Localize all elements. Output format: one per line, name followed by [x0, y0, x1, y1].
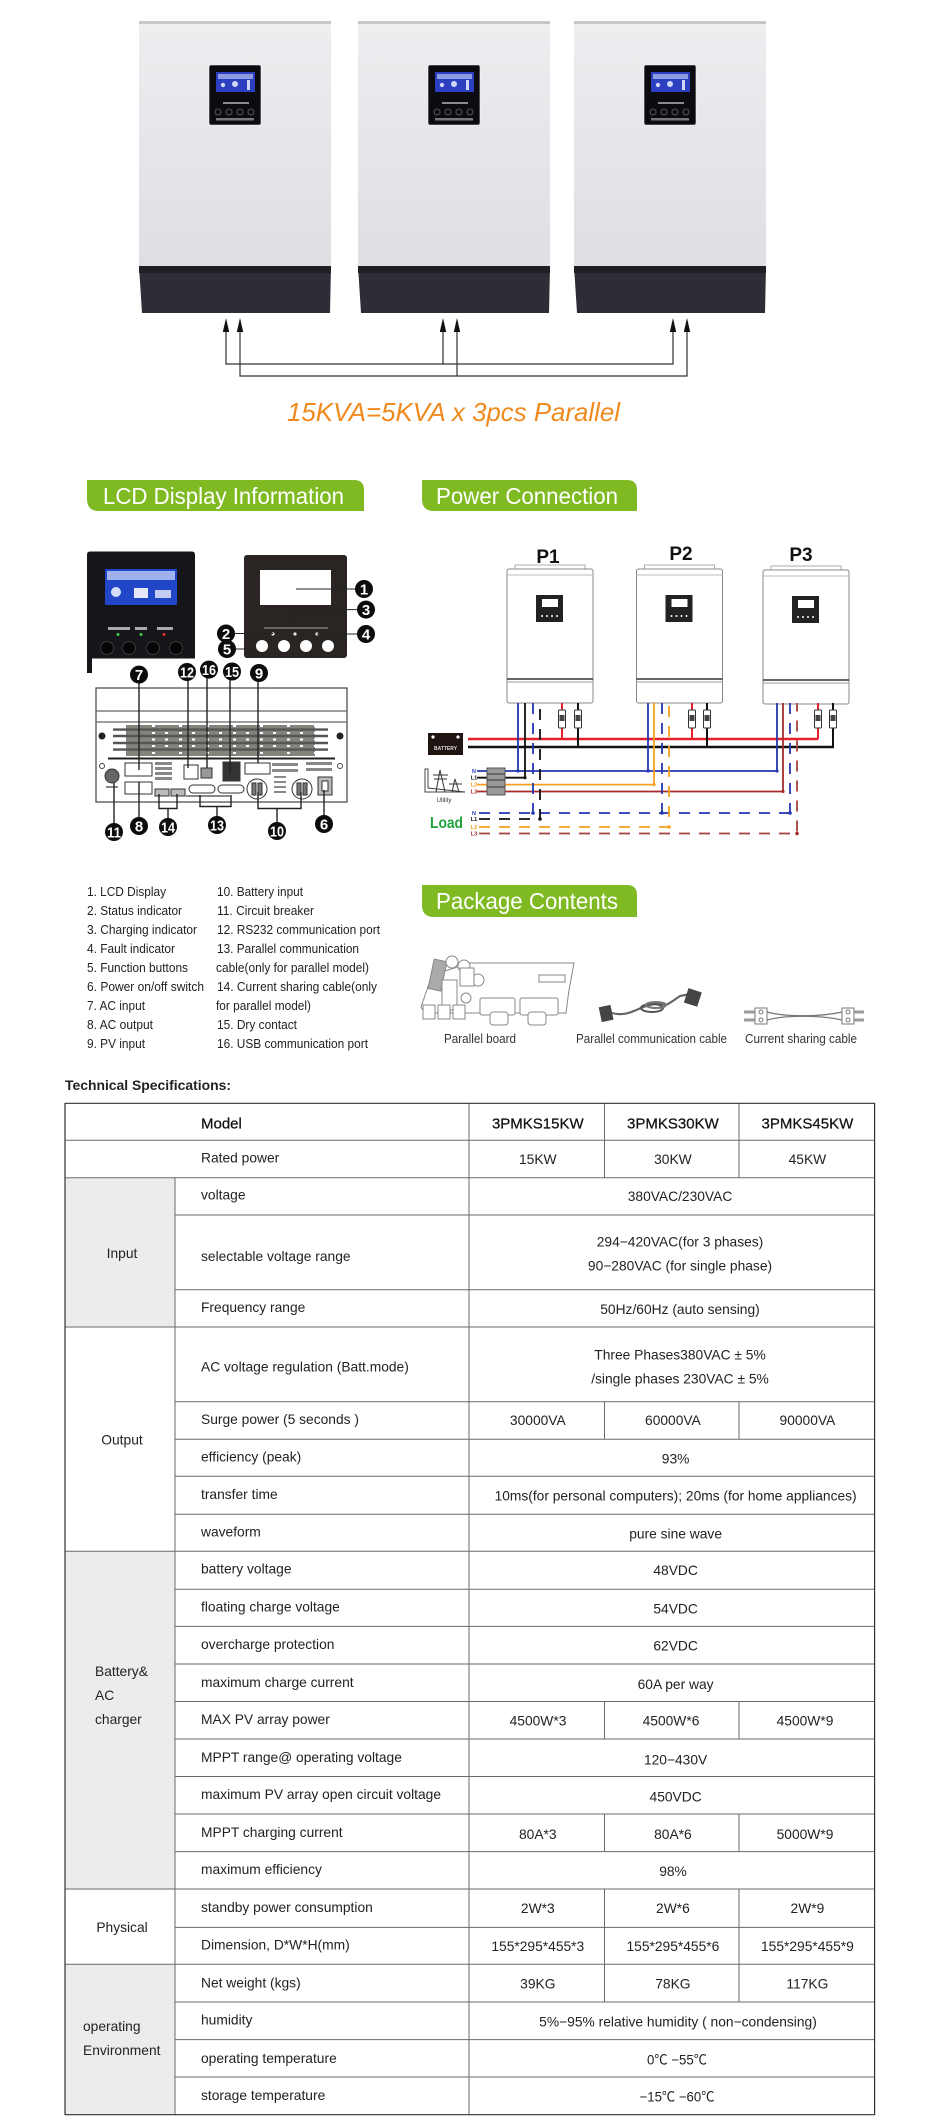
- parameter labels: Rated power: [201, 1150, 280, 1166]
- ports row: [105, 762, 332, 799]
- values: 80A*3: [519, 1827, 557, 1842]
- heading: LCD Display Information: LCD Display Information: [103, 483, 344, 509]
- phase labels: [471, 769, 477, 838]
- callout numbers: 11: [107, 824, 121, 842]
- parameter labels: operating temperature: [201, 2051, 337, 2066]
- icon: parallel communication cable: [599, 988, 702, 1022]
- unit labels: P2: [669, 544, 693, 565]
- callout numbers: 4: [362, 626, 371, 644]
- category labels: AC: [95, 1688, 114, 1703]
- text block: legend column 2: 11. Circuit breaker: [217, 903, 315, 918]
- values: 5000W*9: [777, 1827, 834, 1842]
- values: 30000VA: [510, 1413, 566, 1428]
- values: 5%−95% relative humidity ( non−condensing): [539, 2015, 817, 2030]
- DC wires: [468, 703, 834, 747]
- parameter labels: battery voltage: [201, 1562, 292, 1576]
- callout numbers: 10: [270, 824, 284, 840]
- unit labels: P3: [789, 545, 813, 566]
- icon: AC terminal block: [487, 768, 505, 795]
- values: 90−280VAC (for single phase): [588, 1259, 772, 1274]
- text block: legend column 2: 13. Parallel communication: [217, 941, 359, 956]
- values: 93%: [662, 1452, 689, 1467]
- values: 2W*6: [656, 1901, 690, 1916]
- inverter 3: [574, 21, 766, 313]
- text block: legend column 2: 14. Current sharing cable(only: [217, 979, 377, 994]
- AC input wires: [477, 703, 783, 792]
- header row: 3PMKS45KW: [762, 1116, 854, 1132]
- values: 98%: [659, 1864, 687, 1879]
- diagram: power connection wiring: [425, 544, 849, 838]
- parameter labels: maximum charge current: [201, 1675, 354, 1690]
- phase labels: N: [472, 811, 476, 817]
- values: Three Phases380VAC ± 5%: [594, 1347, 766, 1362]
- parameter labels: [200, 1150, 441, 2103]
- text block: legend column 2: [216, 884, 380, 1051]
- values: 80A*6: [654, 1827, 692, 1842]
- values: 60000VA: [645, 1413, 702, 1428]
- callout numbers: 9: [255, 666, 263, 682]
- parameter labels: MPPT range@ operating voltage: [201, 1750, 402, 1765]
- phase labels: L3: [471, 790, 477, 796]
- package item captions: Current sharing cable: [745, 1031, 857, 1046]
- parameter labels: maximum PV array open circuit voltage: [201, 1787, 441, 1802]
- text block: legend column 1: 3. Charging indicator: [87, 922, 198, 937]
- values: 117KG: [786, 1977, 828, 1992]
- package item captions: [444, 1031, 857, 1046]
- callout numbers: 2: [222, 626, 230, 643]
- parameter labels: overcharge protection: [201, 1637, 334, 1652]
- values: 10ms(for personal computers); 20ms (for home appliances): [495, 1489, 857, 1504]
- text block: legend column 1: 9. PV input: [87, 1036, 145, 1051]
- values: 50Hz/60Hz (auto sensing): [600, 1302, 760, 1317]
- values: 294−420VAC(for 3 phases): [597, 1235, 763, 1250]
- phase labels: L1: [471, 776, 477, 782]
- parameter labels: Dimension, D*W*H(mm): [201, 1938, 350, 1952]
- text block: legend column 2: 10. Battery input: [217, 884, 303, 899]
- parameter labels: Surge power (5 seconds ): [201, 1412, 359, 1427]
- heading: Power Connection: Power Connection: [436, 483, 618, 509]
- load label: Load: [430, 815, 463, 832]
- parameter labels: voltage: [201, 1188, 246, 1202]
- text block: legend column 2: 16. USB communication port: [217, 1036, 368, 1051]
- header row: 3PMKS15KW: [492, 1116, 584, 1132]
- text block: legend column 2: 12. RS232 communication port: [217, 922, 380, 937]
- header row: Model: [201, 1116, 242, 1132]
- parameter labels: humidity: [201, 2012, 252, 2028]
- load dashed wires: [479, 703, 797, 834]
- values: 45KW: [789, 1152, 826, 1167]
- category labels: [83, 1246, 161, 2058]
- text block: legend column 1: 4. Fault indicator: [87, 941, 176, 956]
- parameter labels: waveform: [200, 1524, 261, 1540]
- callout numbers: 7: [135, 667, 143, 684]
- inverter units: [507, 565, 849, 704]
- unit labels: P1: [536, 547, 560, 568]
- text block: legend column 1: 2. Status indicator: [87, 903, 183, 918]
- callout numbers: 3: [362, 602, 370, 619]
- values: /single phases 230VAC ± 5%: [591, 1371, 769, 1386]
- text block: legend column 1: 6. Power on/off switch: [87, 979, 204, 994]
- parameter labels: transfer time: [201, 1487, 278, 1502]
- callout numbers: 13: [210, 818, 224, 834]
- phase labels: N: [472, 769, 476, 775]
- product photo: three inverters connected in parallel: [139, 21, 766, 313]
- panel: LCD front diagram with callouts: [234, 555, 358, 658]
- inverter 2: [358, 21, 550, 313]
- values: 4500W*3: [510, 1714, 567, 1729]
- category labels: Input: [107, 1246, 138, 1261]
- text block: legend column 1: 7. AC input: [87, 998, 145, 1013]
- callout numbers: 14: [161, 820, 176, 836]
- callout numbers: 6: [320, 816, 328, 834]
- callout numbers: 16: [202, 662, 216, 679]
- diagram: rear panel of inverter: [96, 670, 347, 832]
- category labels: operating: [83, 2019, 141, 2034]
- heading: Package Contents: Package Contents: [436, 888, 618, 914]
- text block: legend column 2: for parallel model): [216, 998, 311, 1013]
- parameter labels: Net weight (kgs): [201, 1976, 301, 1990]
- values: 450VDC: [650, 1790, 702, 1805]
- arrows: parallel connection lines between inverters: [223, 318, 690, 376]
- parameter labels: selectable voltage range: [201, 1249, 351, 1264]
- values: pure sine wave: [629, 1527, 722, 1542]
- parameter labels: AC voltage regulation (Batt.mode): [201, 1360, 409, 1374]
- values: 4500W*9: [777, 1714, 834, 1729]
- callout numbers: 15: [225, 664, 239, 681]
- phase labels: L3: [471, 832, 477, 838]
- phase labels: L2: [471, 825, 477, 831]
- package item captions: Parallel board: [444, 1031, 516, 1046]
- text block: legend column 1: 5. Function buttons: [87, 960, 188, 975]
- callout numbers: 1: [360, 582, 368, 598]
- text block: legend column 2: 15. Dry contact: [217, 1017, 297, 1032]
- values: −15℃ −60℃: [640, 2090, 715, 2105]
- parameter labels: floating charge voltage: [201, 1600, 340, 1614]
- parameter labels: MPPT charging current: [201, 1825, 343, 1840]
- icon: utility pylons: Utility: [437, 798, 451, 804]
- values: 155*295*455*6: [626, 1939, 720, 1954]
- icon: current sharing cable: [744, 1008, 864, 1024]
- values: 0℃ −55℃: [647, 2052, 707, 2068]
- callout numbers: [105, 580, 375, 842]
- text block: legend column 1: 8. AC output: [87, 1017, 153, 1032]
- values: 90000VA: [780, 1413, 836, 1428]
- icon: utility pylons: [425, 769, 465, 804]
- unit labels: [536, 544, 813, 568]
- header row: 3PMKS30KW: [627, 1116, 720, 1132]
- category labels: Output: [101, 1432, 143, 1448]
- caption: parallel configuration: 15KVA=5KVA x 3pcs Parallel: [287, 397, 621, 427]
- callout numbers: 12: [180, 664, 194, 682]
- icon: battery: BATTERY: [434, 746, 458, 752]
- values: 48VDC: [653, 1563, 698, 1578]
- values: 39KG: [520, 1977, 555, 1992]
- values: 380VAC/230VAC: [628, 1189, 732, 1204]
- values: 120−430V: [644, 1753, 708, 1768]
- parameter labels: standby power consumption: [201, 1900, 373, 1915]
- parameter labels: storage temperature: [201, 2088, 326, 2103]
- values: 15KW: [519, 1152, 557, 1167]
- panel: LCD front photo: [87, 552, 195, 673]
- values: 155*295*455*3: [491, 1939, 585, 1954]
- values: [491, 1152, 857, 2105]
- values: 2W*9: [791, 1901, 825, 1916]
- parameter labels: maximum efficiency: [201, 1862, 322, 1877]
- values: 78KG: [655, 1977, 691, 1992]
- phase labels: L2: [471, 782, 477, 788]
- callout numbers: 5: [223, 642, 231, 658]
- inverter 1: [139, 21, 331, 313]
- values: 155*295*455*9: [761, 1939, 854, 1954]
- values: 4500W*6: [643, 1714, 700, 1729]
- values: 54VDC: [653, 1601, 698, 1616]
- icon: battery: [428, 733, 463, 755]
- category labels: charger: [95, 1712, 142, 1727]
- parameter labels: Frequency range: [201, 1300, 306, 1315]
- parameter labels: MAX PV array power: [201, 1712, 330, 1727]
- heading: Technical Specifications: Technical Specifications:: [65, 1078, 231, 1093]
- text block: legend column 2: cable(only for parallel model): [216, 960, 369, 975]
- category labels: Battery&: [95, 1664, 148, 1679]
- text block: legend column 1: 1. LCD Display: [87, 884, 166, 899]
- header row: [201, 1116, 854, 1132]
- category labels: Physical: [96, 1920, 148, 1935]
- values: 62VDC: [653, 1638, 698, 1654]
- table: technical specifications: [65, 1103, 875, 2115]
- callout numbers: 8: [135, 818, 143, 836]
- category labels: Environment: [83, 2043, 161, 2058]
- values: 30KW: [654, 1152, 692, 1167]
- parameter labels: efficiency (peak): [201, 1450, 301, 1464]
- values: 2W*3: [521, 1901, 555, 1916]
- category shading: [65, 1178, 175, 2115]
- package item captions: Parallel communication cable: [576, 1031, 727, 1046]
- values: 60A per way: [638, 1677, 714, 1692]
- phase labels: L1: [471, 817, 477, 823]
- text block: legend column 1: [87, 884, 204, 1051]
- icon: parallel board: [421, 956, 574, 1025]
